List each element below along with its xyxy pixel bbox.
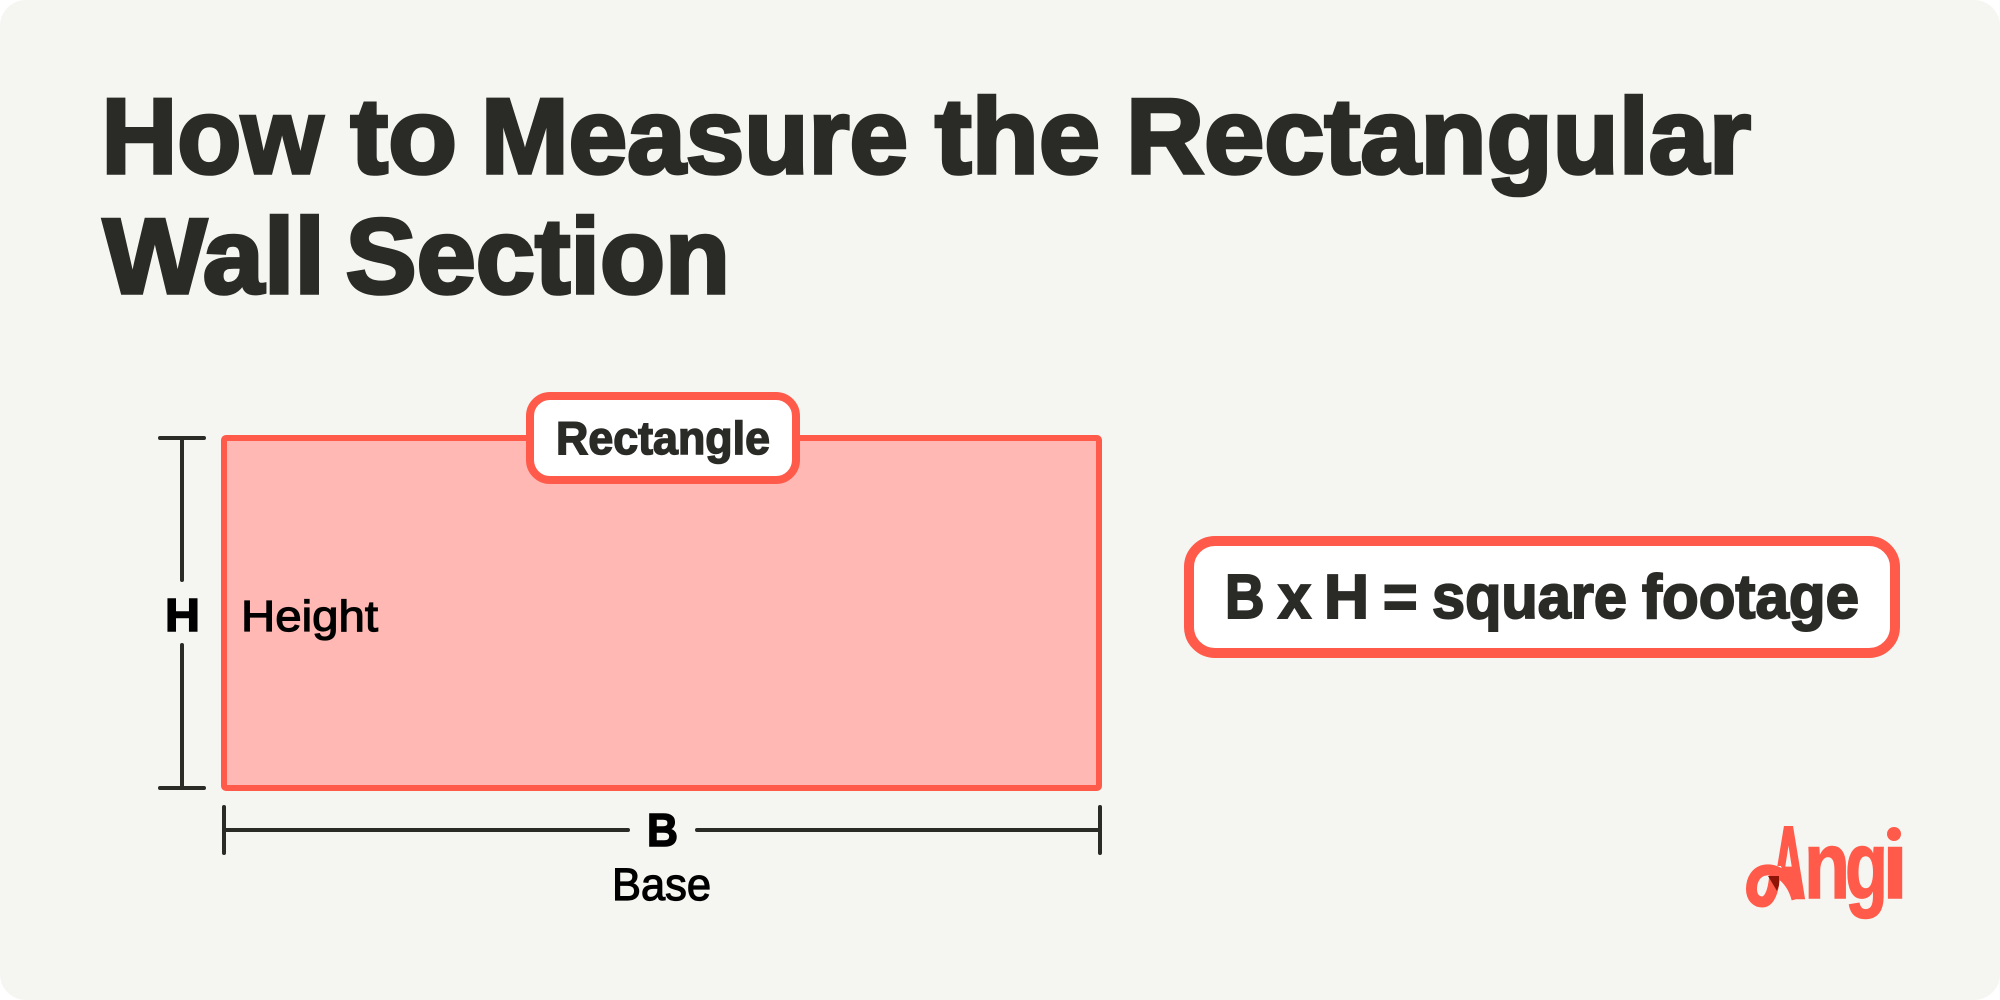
- title: to: [350, 76, 457, 196]
- callout: formula: square: [1432, 563, 1627, 632]
- title: Wall: [103, 196, 325, 316]
- callout: formula: H: [1324, 563, 1369, 632]
- base dimension: [224, 804, 1100, 856]
- label: rectangle: Rectangle: [556, 412, 770, 464]
- title: the: [935, 76, 1100, 196]
- title: How: [102, 76, 324, 196]
- height dimension: [160, 438, 204, 788]
- height dimension: H: [165, 589, 200, 641]
- title: Rectangular: [1126, 76, 1751, 196]
- callout: formula: B: [1225, 563, 1264, 632]
- label: rectangle: [530, 396, 796, 480]
- panel: rectangle wall section: [224, 438, 1099, 788]
- logo: Angi: n: [1804, 812, 1850, 919]
- callout: formula: =: [1383, 563, 1418, 632]
- callout: formula: footage: [1642, 563, 1859, 632]
- logo: Angi: g: [1845, 812, 1888, 919]
- base dimension: B: [647, 804, 678, 856]
- title: [102, 76, 1751, 316]
- logo: Angi: A: [1772, 807, 1805, 919]
- title: Section: [346, 196, 730, 316]
- callout: formula: [1189, 541, 1895, 653]
- logo: Angi: [1746, 826, 1902, 920]
- callout: formula: x: [1278, 563, 1311, 632]
- logo: Angi: ı: [1882, 812, 1908, 919]
- label: height: Height: [241, 592, 378, 641]
- label: base: Base: [612, 859, 711, 910]
- title: Measure: [481, 76, 908, 196]
